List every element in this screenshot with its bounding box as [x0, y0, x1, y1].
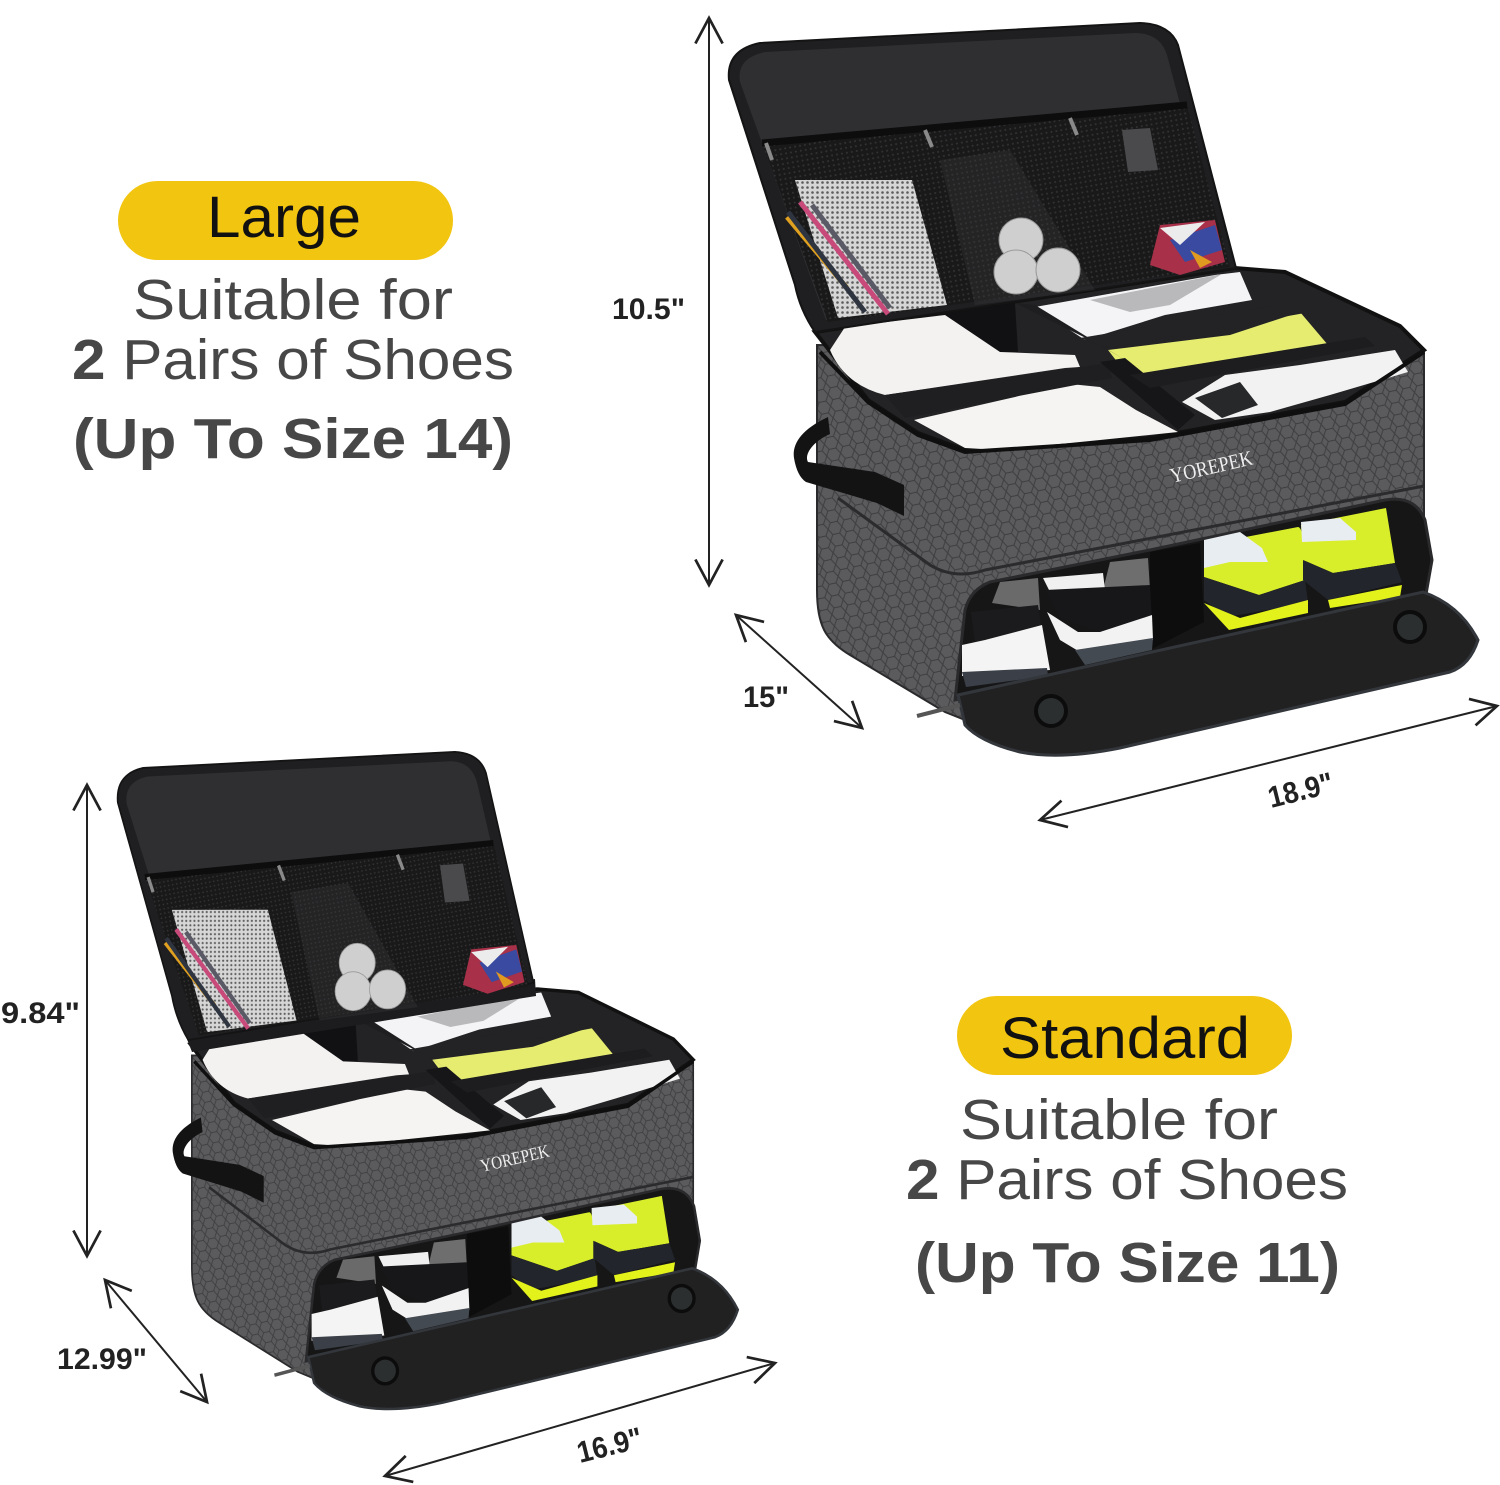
zipper pull	[766, 118, 1077, 160]
seam	[838, 486, 1424, 574]
notepad	[795, 180, 947, 318]
bag body and tray	[794, 268, 1478, 755]
label: 12.99: 12.99"	[57, 1343, 147, 1376]
text: up to size 11: (Up To Size 11)	[915, 1231, 1340, 1295]
badge: Large: Large	[207, 185, 361, 250]
body	[817, 345, 1424, 720]
tool	[1122, 128, 1158, 172]
text: up to size 14: (Up To Size 14)	[73, 407, 513, 471]
lower compartment	[955, 499, 1432, 700]
text: 2 pairs of shoes: 2 Pairs of Shoes	[72, 328, 514, 392]
arrow: depth large	[736, 615, 862, 728]
mesh lighter folds	[940, 150, 1095, 305]
label: 16.9: 16.9"	[574, 1422, 646, 1470]
white golf shoes	[1182, 350, 1408, 420]
white folded shirt	[1035, 272, 1252, 340]
brand text standard: YOREPEK	[478, 1141, 551, 1176]
text: suitable for: Suitable for	[960, 1088, 1278, 1152]
label: 15: 15"	[743, 681, 789, 714]
grey collar	[1090, 274, 1222, 312]
arrow: width large	[1040, 706, 1497, 820]
black shoe right	[1043, 558, 1153, 665]
inner lining	[740, 33, 1222, 320]
pens	[787, 202, 890, 314]
panel: standard size text	[906, 996, 1348, 1295]
label: 18.9: 18.9"	[1265, 767, 1337, 815]
mesh pocket	[762, 105, 1230, 322]
front flap	[958, 592, 1478, 755]
handle	[794, 417, 904, 516]
towel	[914, 383, 1178, 450]
compartment dividers	[885, 303, 1375, 430]
open lid shell	[729, 23, 1236, 332]
snap	[1395, 612, 1425, 642]
product image: large bag	[729, 23, 1478, 755]
black shoe left	[962, 578, 1050, 687]
arrow: width standard	[385, 1363, 775, 1476]
badge: Standard	[957, 996, 1292, 1075]
yellow shoe right	[1301, 508, 1402, 608]
zipper	[762, 105, 1187, 143]
badge: Standard: Standard	[1000, 1006, 1250, 1071]
yellow shirt	[1108, 312, 1328, 380]
zipper pull	[917, 705, 960, 716]
yellow shoe left	[1204, 527, 1308, 630]
arrow: height standard	[86, 785, 88, 1256]
brand text large: YOREPEK	[1168, 446, 1255, 488]
back wall	[940, 303, 1018, 352]
badge: Large	[118, 181, 453, 260]
text: suitable for: Suitable for	[133, 268, 453, 332]
product image: standard bag	[118, 749, 738, 1409]
label: 10.5: 10.5"	[612, 293, 685, 326]
golf balls	[994, 218, 1080, 294]
text: 2 pairs of shoes: 2 Pairs of Shoes	[906, 1148, 1348, 1212]
arrow: height large	[708, 18, 710, 585]
golf tees	[1150, 220, 1225, 275]
label: 9.84: 9.84"	[1, 997, 80, 1030]
open tray	[815, 268, 1424, 452]
arrow: depth standard	[105, 1280, 207, 1402]
divider	[1150, 543, 1204, 650]
panel: large size text	[72, 181, 514, 471]
rim zipper	[820, 352, 1424, 452]
white cap	[830, 315, 1080, 395]
snap	[1036, 696, 1066, 726]
